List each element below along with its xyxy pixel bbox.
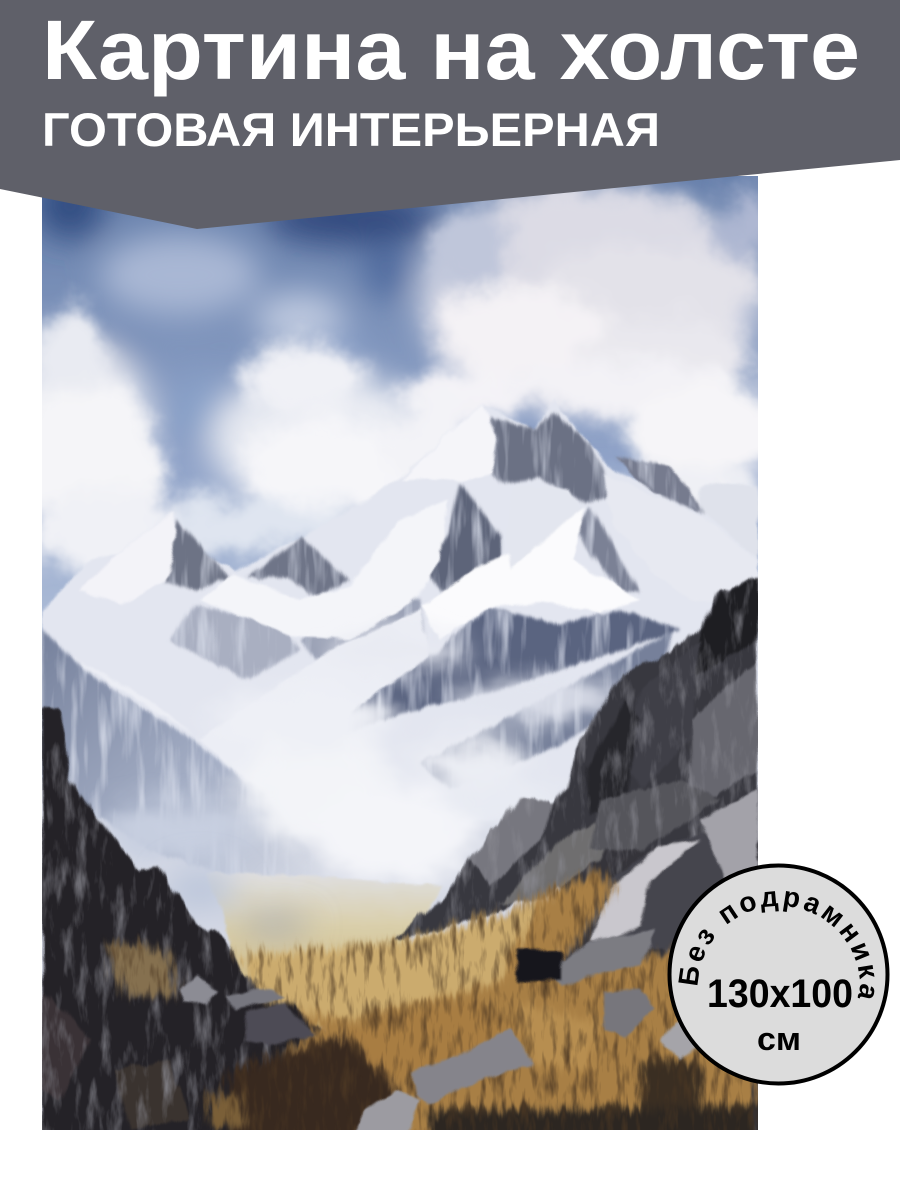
sky: clouds (7, 187, 795, 580)
sky: tonal washes (10, 170, 760, 510)
left slate mountain (42, 628, 300, 875)
foreground golden grass (105, 870, 758, 1160)
valley haze smudges (165, 868, 310, 935)
badge arc text: Без подрамника (678, 891, 874, 998)
size badge (668, 864, 890, 1086)
slate faces with streaks (165, 412, 704, 790)
subtitle: ГОТОВАЯ ИНТЕРЬЕРНАЯ (42, 103, 660, 156)
right grey boulders (590, 790, 758, 960)
badge size: 130x100 (707, 972, 853, 1016)
header banner (0, 0, 900, 229)
badge unit: см (757, 1021, 801, 1057)
mist (105, 635, 630, 885)
snow massif (42, 400, 758, 820)
far ridge (616, 456, 758, 573)
snow highlights (81, 406, 758, 766)
right dark cliffs (389, 577, 770, 1140)
lower base tone (42, 640, 758, 1130)
painting: mountain landscape (42, 176, 758, 1130)
title: Картина на холсте (42, 3, 860, 97)
left dark rocks (42, 706, 326, 1130)
valley (206, 873, 444, 1030)
foreground rocks (179, 930, 720, 1140)
